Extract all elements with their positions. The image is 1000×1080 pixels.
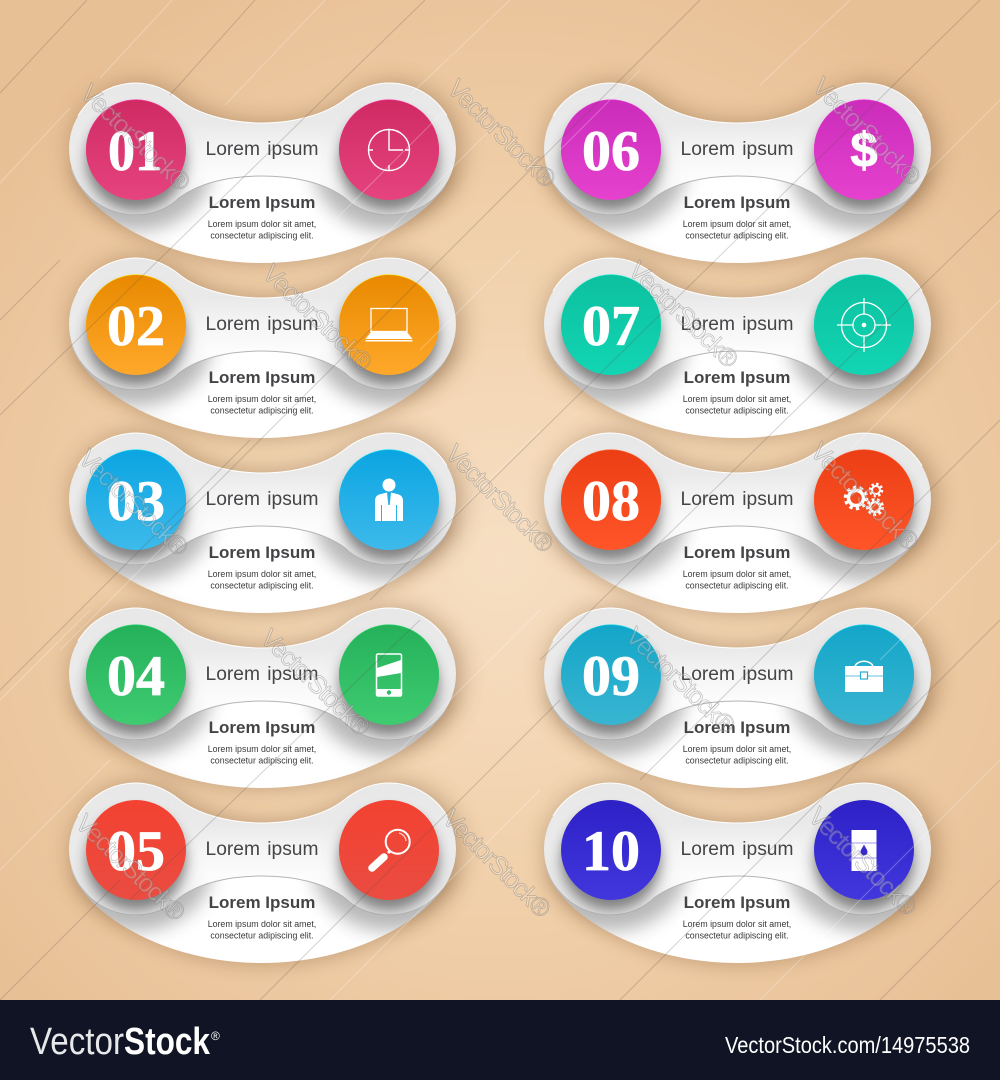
text block: consectetur adipiscing elit. (210, 930, 314, 940)
watermarks: VectorStock® (255, 624, 376, 742)
number badge 07: 07 (582, 295, 640, 358)
card 04 (60, 608, 465, 791)
text block (683, 893, 791, 940)
card 06 (535, 83, 940, 266)
watermarks: VectorStock® (807, 72, 926, 192)
text block: consectetur adipiscing elit. (685, 930, 789, 940)
card 02 (60, 258, 465, 441)
text block: Lorem Ipsum (684, 718, 790, 737)
footer bar (0, 1000, 1000, 1080)
heading: Lorem ipsum (206, 839, 318, 860)
number badge 06 (561, 99, 661, 200)
heading: Lorem ipsum (206, 489, 318, 510)
icon: oil barrel (814, 800, 914, 900)
text block: Lorem Ipsum (684, 193, 790, 212)
footer logo (30, 1021, 220, 1063)
icon: dollar (814, 99, 914, 200)
text block: Lorem ipsum dolor sit amet, (683, 394, 791, 404)
text block: Lorem Ipsum (209, 193, 315, 212)
number badge 10: 10 (582, 820, 640, 883)
text block: Lorem Ipsum (209, 543, 315, 562)
number badge 01: 01 (108, 120, 162, 183)
number badge 04: 04 (107, 645, 165, 708)
watermarks: VectorStock® (623, 256, 744, 374)
number badge 05: 05 (107, 820, 165, 883)
text block (683, 193, 791, 240)
icon: smartphone (339, 624, 439, 725)
footer image id: VectorStock.com/14975538 (725, 1032, 970, 1058)
text block: Lorem ipsum dolor sit amet, (683, 744, 791, 754)
number badge 03: 03 (107, 470, 165, 533)
text block: Lorem ipsum dolor sit amet, (208, 569, 316, 579)
text block (208, 718, 316, 766)
text block: Lorem ipsum dolor sit amet, (208, 919, 316, 929)
text block: consectetur adipiscing elit. (685, 580, 789, 590)
icon: laptop (339, 274, 439, 375)
footer logo: Vector (30, 1021, 124, 1063)
text block: Lorem ipsum dolor sit amet, (208, 744, 316, 754)
watermarks: VectorStock® (257, 259, 378, 377)
text block (683, 543, 791, 590)
text block: consectetur adipiscing elit. (210, 756, 314, 766)
icon: briefcase (814, 624, 914, 725)
watermarks: VectorStock® (442, 74, 561, 194)
heading: Lorem ipsum (681, 314, 793, 335)
watermarks: VectorStock® (440, 439, 559, 559)
heading: Lorem ipsum (681, 664, 793, 685)
text block: Lorem Ipsum (684, 368, 790, 387)
icon: person (339, 449, 439, 550)
text block: consectetur adipiscing elit. (210, 230, 314, 240)
watermarks (70, 72, 926, 927)
heading: Lorem ipsum (206, 664, 318, 685)
number badge 09: 09 (582, 645, 640, 708)
text block: consectetur adipiscing elit. (685, 756, 789, 766)
card 10 (535, 783, 940, 966)
text block: Lorem ipsum dolor sit amet, (208, 219, 316, 229)
text block: consectetur adipiscing elit. (210, 406, 314, 416)
card 01 (60, 83, 465, 266)
number badge 02: 02 (107, 295, 165, 358)
text block (208, 368, 316, 416)
text block: Lorem Ipsum (209, 893, 315, 912)
icon: clock (339, 99, 439, 200)
number badge 02 (86, 274, 186, 375)
icon: dollar: $ (850, 124, 878, 178)
number badge 04 (86, 624, 186, 725)
number badge 09 (561, 624, 661, 725)
heading: Lorem ipsum (206, 314, 318, 335)
card 05 (60, 783, 465, 966)
icon: magnifier (339, 800, 439, 900)
watermarks: VectorStock® (803, 802, 922, 922)
footer logo: ® (211, 1029, 220, 1043)
watermarks: VectorStock® (70, 809, 191, 927)
number badge 10 (561, 800, 661, 900)
heading: Lorem ipsum (681, 489, 793, 510)
text block (683, 368, 791, 416)
text block: Lorem ipsum dolor sit amet, (683, 219, 791, 229)
text block (683, 718, 791, 766)
watermarks: VectorStock® (73, 444, 194, 562)
footer logo: Stock (124, 1021, 211, 1063)
text block: consectetur adipiscing elit. (210, 580, 314, 590)
text block: Lorem Ipsum (684, 893, 790, 912)
text block: Lorem Ipsum (209, 368, 315, 387)
watermarks: VectorStock® (75, 79, 196, 197)
number badge 06: 06 (582, 120, 640, 183)
icon: gears (814, 449, 914, 550)
card 08 (535, 433, 940, 616)
number badge 03 (86, 449, 186, 550)
card 09 (535, 608, 940, 791)
watermarks: VectorStock® (437, 804, 556, 924)
text block (208, 193, 316, 240)
text block (208, 543, 316, 590)
number badge 07 (561, 274, 661, 375)
text block (208, 893, 316, 940)
text block: Lorem ipsum dolor sit amet, (208, 394, 316, 404)
number badge 05 (86, 800, 186, 900)
heading: Lorem ipsum (206, 139, 318, 160)
number badge 08: 08 (582, 470, 640, 533)
number badge 08 (561, 449, 661, 550)
heading: Lorem ipsum (681, 839, 793, 860)
card 07 (535, 258, 940, 441)
number badge 01 (86, 99, 186, 200)
watermarks: VectorStock® (805, 437, 924, 557)
card 03 (60, 433, 465, 616)
text block: Lorem Ipsum (684, 543, 790, 562)
icon: target (814, 274, 914, 375)
text block: Lorem Ipsum (209, 718, 315, 737)
text block: Lorem ipsum dolor sit amet, (683, 569, 791, 579)
watermarks: VectorStock® (620, 622, 741, 740)
text block: consectetur adipiscing elit. (685, 406, 789, 416)
text block: consectetur adipiscing elit. (685, 230, 789, 240)
heading: Lorem ipsum (681, 139, 793, 160)
text block: Lorem ipsum dolor sit amet, (683, 919, 791, 929)
